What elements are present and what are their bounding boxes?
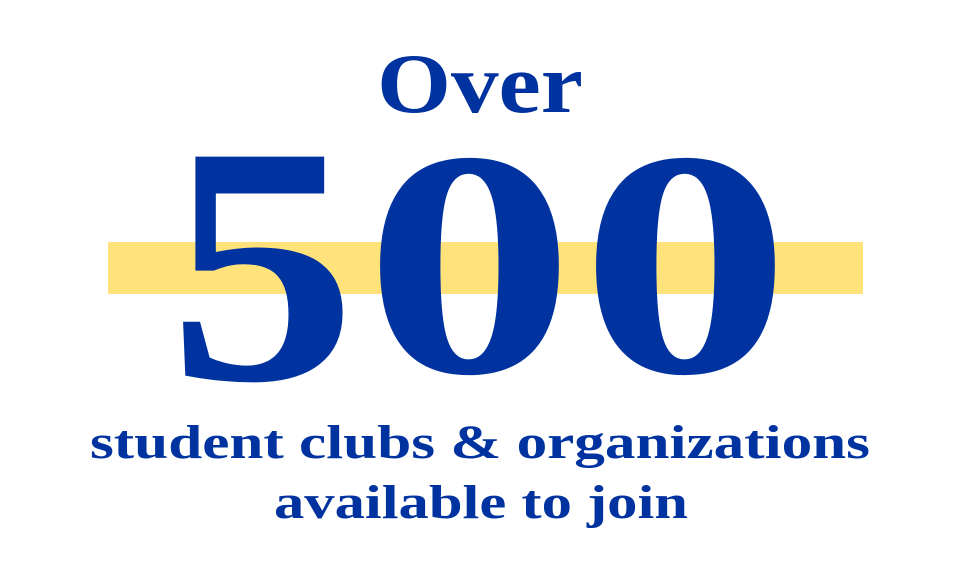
digit 0: 0 [364,86,575,442]
big number: 500 [168,76,791,453]
yellow highlight bar [108,242,863,294]
caption line 1: student clubs & organizations [90,416,870,469]
heading: Over: Over [377,37,583,131]
digit 0: 0 [580,86,791,442]
digit 5: 5 [168,76,356,453]
caption line 2: available to join [274,476,688,529]
